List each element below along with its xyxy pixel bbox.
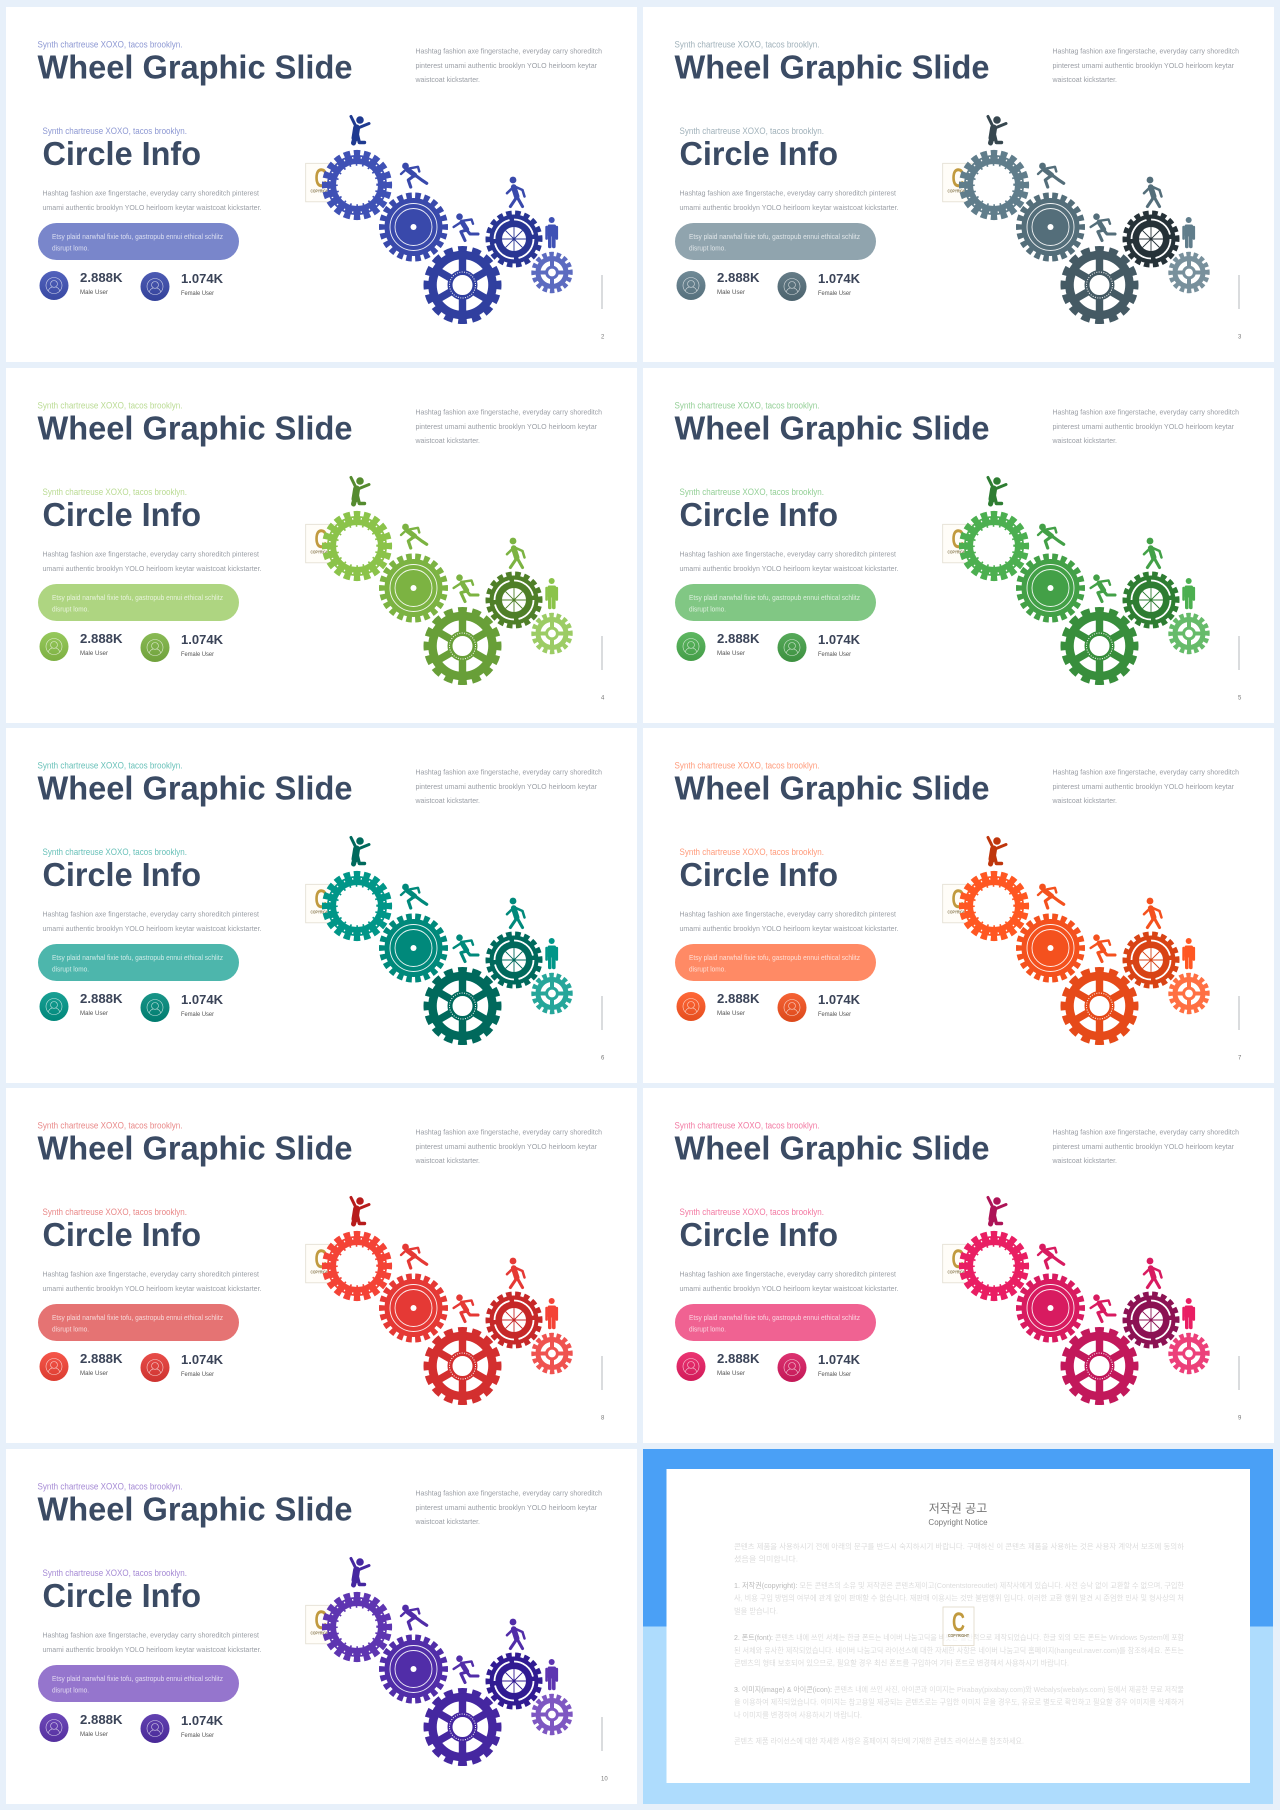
body text: umami authentic brooklyn YOLO heirloom keytar waistcoat kickstarter. bbox=[680, 1284, 898, 1293]
logo watermark bbox=[306, 1244, 337, 1283]
pill callout: disrupt lomo. bbox=[689, 244, 726, 253]
gears and people bbox=[962, 116, 1207, 321]
stat: male bbox=[717, 990, 760, 1016]
body text: umami authentic brooklyn YOLO heirloom keytar waistcoat kickstarter. bbox=[42, 1644, 262, 1654]
intro text bbox=[415, 1488, 602, 1526]
notice subtitle: Copyright Notice bbox=[928, 1518, 988, 1527]
icon: male user bbox=[676, 992, 706, 1020]
page number: 10 bbox=[601, 1776, 608, 1782]
panel: slide 7 orange bbox=[643, 728, 1274, 1082]
pill callout bbox=[675, 584, 876, 620]
stat: male: Male User bbox=[717, 650, 746, 656]
intro text bbox=[1052, 407, 1239, 444]
pill callout bbox=[675, 944, 876, 980]
stat: female bbox=[818, 632, 861, 658]
icon: male user bbox=[40, 271, 68, 300]
logo watermark: COPYRIGHT bbox=[310, 188, 331, 194]
stat: female: Female User bbox=[818, 1010, 852, 1018]
eyebrow: Synth chartreuse XOXO, tacos brooklyn. bbox=[674, 760, 820, 770]
intro text: waistcoat kickstarter. bbox=[1052, 436, 1117, 444]
intro text: Hashtag fashion axe fingerstache, everyday carry shoreditch bbox=[1052, 767, 1239, 776]
eyebrow: Synth chartreuse XOXO, tacos brooklyn. bbox=[674, 1121, 820, 1131]
icon: male user bbox=[40, 992, 68, 1020]
heading: Circle Info bbox=[42, 1576, 201, 1614]
panel: slide 5 green bbox=[643, 368, 1274, 722]
logo watermark bbox=[943, 524, 974, 562]
eyebrow: Synth chartreuse XOXO, tacos brooklyn. bbox=[674, 400, 820, 410]
body text: umami authentic brooklyn YOLO heirloom keytar waistcoat kickstarter. bbox=[680, 564, 898, 572]
notice section: font bbox=[734, 1632, 1184, 1668]
pill callout: disrupt lomo. bbox=[689, 1325, 726, 1334]
stat: female: Female User bbox=[181, 1371, 215, 1378]
logo watermark: C bbox=[952, 1607, 965, 1637]
body text: Hashtag fashion axe fingerstache, everyday carry shoreditch pinterest bbox=[680, 1270, 897, 1279]
pill callout: disrupt lomo. bbox=[52, 964, 89, 973]
page number: 2 bbox=[601, 335, 605, 341]
intro text: pinterest umami authentic brooklyn YOLO heirloom keytar bbox=[1052, 61, 1234, 70]
title: Wheel Graphic Slide bbox=[38, 1490, 352, 1527]
pill callout: Etsy plaid narwhal fixie tofu, gastropub ennui ethical schlitz bbox=[52, 1313, 223, 1322]
pill callout: Etsy plaid narwhal fixie tofu, gastropub ennui ethical schlitz bbox=[689, 592, 860, 602]
gears and people bbox=[962, 477, 1207, 682]
heading: Circle Info bbox=[680, 856, 838, 892]
logo watermark bbox=[943, 163, 974, 202]
body text: umami authentic brooklyn YOLO heirloom keytar waistcoat kickstarter. bbox=[42, 1284, 262, 1293]
intro text: pinterest umami authentic brooklyn YOLO heirloom keytar bbox=[1052, 1142, 1234, 1151]
pill callout: Etsy plaid narwhal fixie tofu, gastropub ennui ethical schlitz bbox=[689, 1313, 860, 1322]
sub eyebrow: Synth chartreuse XOXO, tacos brooklyn. bbox=[42, 1207, 187, 1217]
body text bbox=[42, 909, 262, 932]
notice section: image and icon: 3. 이미지(image) & 아이콘(icon): 콘텐츠 내에 쓰인 사진, 아이콘과 이미지는 Pixabay(pixabay.com)와 Webalys(webalys.com) 등에서 제공한 무료 저작물 bbox=[734, 1684, 1184, 1694]
heading: Circle Info bbox=[42, 496, 201, 532]
sub eyebrow: Synth chartreuse XOXO, tacos brooklyn. bbox=[42, 846, 187, 856]
intro text: pinterest umami authentic brooklyn YOLO heirloom keytar bbox=[416, 1502, 597, 1512]
icon: female user bbox=[140, 992, 170, 1022]
title: Wheel Graphic Slide bbox=[38, 48, 352, 85]
page number: 5 bbox=[1238, 695, 1242, 701]
stat: male bbox=[80, 1351, 123, 1377]
stat: female: 1.074K bbox=[818, 992, 861, 1006]
body text bbox=[42, 189, 262, 212]
gears and people bbox=[325, 116, 570, 321]
icon: female user bbox=[140, 1714, 170, 1742]
sub eyebrow: Synth chartreuse XOXO, tacos brooklyn. bbox=[680, 486, 824, 496]
body text: Hashtag fashion axe fingerstache, everyday carry shoreditch pinterest bbox=[42, 909, 260, 918]
intro text: pinterest umami authentic brooklyn YOLO heirloom keytar bbox=[416, 422, 597, 430]
notice section: image and icon bbox=[734, 1684, 1184, 1720]
page number: 4 bbox=[601, 695, 605, 701]
stat: female: 1.074K bbox=[181, 1352, 224, 1367]
body text bbox=[680, 909, 898, 932]
page number: 3 bbox=[1238, 335, 1242, 341]
body text: umami authentic brooklyn YOLO heirloom keytar waistcoat kickstarter. bbox=[42, 203, 262, 212]
eyebrow: Synth chartreuse XOXO, tacos brooklyn. bbox=[38, 760, 182, 770]
pill callout: Etsy plaid narwhal fixie tofu, gastropub ennui ethical schlitz bbox=[52, 952, 223, 962]
stat: female bbox=[181, 1712, 224, 1738]
eyebrow: Synth chartreuse XOXO, tacos brooklyn. bbox=[38, 1121, 182, 1131]
stat: male: Male User bbox=[717, 289, 746, 296]
intro text: Hashtag fashion axe fingerstache, everyday carry shoreditch bbox=[1052, 46, 1239, 56]
notice section: copyright: 1. 저작권(copyright): 모든 콘텐츠의 소유 및 저작권은 콘텐츠제이고(Contentstoreoutlet) 제작사에게 있습니다. 사전 승낙 없이 교환할 수 없으며, 구입한 bbox=[734, 1580, 1184, 1590]
icon: female user bbox=[778, 992, 806, 1022]
panel: slide 2 indigo bbox=[6, 7, 637, 362]
body text: umami authentic brooklyn YOLO heirloom keytar waistcoat kickstarter. bbox=[42, 564, 262, 572]
logo watermark bbox=[306, 524, 337, 562]
stat: male: 2.888K bbox=[80, 1351, 123, 1366]
intro text: pinterest umami authentic brooklyn YOLO heirloom keytar bbox=[1052, 782, 1234, 790]
intro text bbox=[415, 46, 602, 84]
gears and people bbox=[962, 837, 1207, 1042]
stat: male: 2.888K bbox=[80, 990, 123, 1006]
notice section: copyright: 사, 비용 구입 방법의 여부에 관계 없이 판매할 수 없습니다. 재판매 이용시는 것만 불법행위 입니다. 이러한 교환 행위 발견 시 준엄한 민사 및 형사상의 처 bbox=[734, 1592, 1184, 1602]
eyebrow: Synth chartreuse XOXO, tacos brooklyn. bbox=[38, 1481, 182, 1491]
pill callout bbox=[38, 1304, 239, 1341]
stat: male: Male User bbox=[717, 1370, 746, 1377]
stat: male: 2.888K bbox=[80, 270, 123, 285]
stat: male: 2.888K bbox=[717, 270, 760, 285]
stat: male bbox=[80, 990, 123, 1016]
panel: slide 3 blue grey bbox=[643, 7, 1274, 362]
intro text: waistcoat kickstarter. bbox=[415, 1156, 480, 1165]
body text bbox=[42, 1630, 262, 1654]
pill callout: Etsy plaid narwhal fixie tofu, gastropub ennui ethical schlitz bbox=[52, 592, 223, 602]
page number: 7 bbox=[1238, 1055, 1242, 1061]
pill callout: disrupt lomo. bbox=[52, 1685, 89, 1694]
gears and people bbox=[325, 837, 570, 1042]
pill callout: disrupt lomo. bbox=[52, 1325, 89, 1334]
intro text: Hashtag fashion axe fingerstache, everyday carry shoreditch bbox=[416, 407, 602, 416]
title: Wheel Graphic Slide bbox=[674, 1129, 990, 1166]
body text bbox=[42, 549, 262, 572]
logo watermark: C bbox=[314, 524, 328, 554]
pill callout: Etsy plaid narwhal fixie tofu, gastropub ennui ethical schlitz bbox=[689, 952, 860, 962]
logo watermark: COPYRIGHT bbox=[310, 909, 331, 914]
logo watermark bbox=[943, 1244, 974, 1283]
stat: female: 1.074K bbox=[818, 1352, 861, 1367]
logo watermark: COPYRIGHT bbox=[948, 909, 968, 914]
notice section: font: 된 서체와 유사한 제작되었습니다. 네이버 나눔고딕 라이선스에 대한 자세한 사항은 네이버 나눔고딕 홈페이지(hangeul.naver.com)를 참조하세요. 폰트는 bbox=[734, 1645, 1184, 1655]
pill callout: Etsy plaid narwhal fixie tofu, gastropub ennui ethical schlitz bbox=[52, 1674, 223, 1682]
icon: male user bbox=[40, 1712, 68, 1742]
body text: Hashtag fashion axe fingerstache, everyday carry shoreditch pinterest bbox=[42, 1630, 260, 1639]
stat: male: Male User bbox=[80, 289, 109, 296]
eyebrow: Synth chartreuse XOXO, tacos brooklyn. bbox=[674, 40, 820, 50]
intro text: waistcoat kickstarter. bbox=[415, 1516, 480, 1526]
icon: male user bbox=[40, 632, 68, 660]
intro text: Hashtag fashion axe fingerstache, everyday carry shoreditch bbox=[1052, 1128, 1239, 1136]
stat: female bbox=[181, 271, 224, 297]
icon: female user bbox=[778, 1353, 806, 1382]
logo watermark: COPYRIGHT bbox=[948, 188, 968, 194]
pill callout: disrupt lomo. bbox=[689, 604, 726, 613]
pill callout: disrupt lomo. bbox=[52, 244, 89, 253]
pill callout: Etsy plaid narwhal fixie tofu, gastropub ennui ethical schlitz bbox=[52, 232, 223, 241]
gears and people bbox=[325, 477, 570, 682]
heading: Circle Info bbox=[680, 1216, 838, 1253]
stat: female: 1.074K bbox=[181, 1712, 224, 1728]
notice section: copyright: 벌을 받습니다. bbox=[734, 1606, 778, 1616]
panel: copyright notice bbox=[643, 1449, 1273, 1804]
logo watermark: C bbox=[314, 884, 328, 914]
stat: female: 1.074K bbox=[818, 632, 861, 646]
icon: male user bbox=[40, 1352, 68, 1381]
blue background bbox=[643, 1449, 1273, 1804]
stat: female: Female User bbox=[818, 290, 852, 297]
panel: slide 8 red bbox=[6, 1088, 637, 1443]
title: Wheel Graphic Slide bbox=[674, 409, 990, 446]
body text: umami authentic brooklyn YOLO heirloom keytar waistcoat kickstarter. bbox=[42, 924, 262, 932]
logo watermark: C bbox=[314, 163, 328, 193]
icon: male user bbox=[676, 632, 706, 660]
heading: Circle Info bbox=[680, 135, 838, 172]
intro text: pinterest umami authentic brooklyn YOLO heirloom keytar bbox=[1052, 422, 1234, 430]
title: Wheel Graphic Slide bbox=[38, 1129, 352, 1166]
body text: umami authentic brooklyn YOLO heirloom keytar waistcoat kickstarter. bbox=[680, 203, 898, 212]
notice section: font: 2. 폰트(font): 콘텐츠 내에 쓰인 서체는 한글 폰트는 네이버 나눔고딕을 비롯한 일반적으로 제작되었습니다. 한글 외의 모든 폰트는 Windows System에 포함 bbox=[734, 1632, 1184, 1642]
logo watermark: COPYRIGHT bbox=[948, 1633, 969, 1638]
title: Wheel Graphic Slide bbox=[674, 48, 990, 85]
logo watermark: COPYRIGHT bbox=[310, 1270, 331, 1274]
notice title: 저작권 공고 bbox=[929, 1502, 987, 1516]
sub eyebrow: Synth chartreuse XOXO, tacos brooklyn. bbox=[42, 486, 187, 496]
notice footer: 콘텐츠 제품 라이선스에 대한 자세한 사항은 홈페이지 하단에 기재한 콘텐츠 라이선스를 참조하세요. bbox=[734, 1736, 1024, 1746]
stat: female: 1.074K bbox=[181, 632, 224, 646]
pill callout bbox=[38, 584, 239, 620]
intro text: Hashtag fashion axe fingerstache, everyday carry shoreditch bbox=[1052, 407, 1239, 416]
icon: female user bbox=[778, 632, 806, 662]
intro text bbox=[415, 407, 602, 444]
pill callout bbox=[675, 223, 876, 260]
stat: female bbox=[818, 992, 861, 1018]
icon: female user bbox=[140, 632, 170, 662]
notice section: image and icon: 나 이미지를 변경하여 사용하시기 바랍니다. bbox=[734, 1710, 862, 1720]
intro text: Hashtag fashion axe fingerstache, everyday carry shoreditch bbox=[416, 1128, 602, 1136]
intro text bbox=[415, 767, 602, 804]
intro text: pinterest umami authentic brooklyn YOLO heirloom keytar bbox=[416, 1142, 597, 1151]
gears and people bbox=[325, 1197, 570, 1402]
stat: female: 1.074K bbox=[181, 992, 224, 1006]
stat: male: Male User bbox=[80, 1010, 109, 1016]
pill callout bbox=[38, 1664, 239, 1702]
stat: female bbox=[181, 632, 224, 658]
stat: male bbox=[717, 270, 760, 296]
stat: male bbox=[717, 1351, 760, 1377]
logo watermark: C bbox=[952, 884, 964, 914]
panel: slide 6 teal bbox=[6, 728, 637, 1082]
intro text bbox=[1052, 1128, 1239, 1165]
body text: Hashtag fashion axe fingerstache, everyday carry shoreditch pinterest bbox=[680, 909, 897, 918]
body text bbox=[42, 1270, 262, 1293]
stat: male: 2.888K bbox=[717, 630, 760, 646]
stat: female bbox=[181, 992, 224, 1018]
pill callout: disrupt lomo. bbox=[52, 604, 89, 613]
stat: female: Female User bbox=[818, 650, 852, 658]
pill callout: Etsy plaid narwhal fixie tofu, gastropub ennui ethical schlitz bbox=[689, 232, 860, 241]
stat: male: Male User bbox=[80, 1730, 109, 1738]
intro text: pinterest umami authentic brooklyn YOLO heirloom keytar bbox=[416, 61, 597, 70]
body text: Hashtag fashion axe fingerstache, everyday carry shoreditch pinterest bbox=[42, 1270, 260, 1279]
icon: male user bbox=[676, 271, 706, 300]
stat: female: Female User bbox=[181, 1732, 215, 1738]
panel: slide 10 purple bbox=[6, 1448, 637, 1804]
notice section: copyright bbox=[734, 1580, 1184, 1616]
title: Wheel Graphic Slide bbox=[674, 769, 990, 806]
pill callout bbox=[38, 223, 239, 260]
stat: male: 2.888K bbox=[717, 1351, 760, 1366]
stat: male bbox=[717, 630, 760, 656]
eyebrow: Synth chartreuse XOXO, tacos brooklyn. bbox=[38, 40, 182, 50]
intro text: waistcoat kickstarter. bbox=[415, 796, 480, 804]
sub eyebrow: Synth chartreuse XOXO, tacos brooklyn. bbox=[680, 1207, 824, 1217]
white card bbox=[666, 1469, 1250, 1783]
stat: male bbox=[80, 1712, 123, 1738]
logo watermark: COPYRIGHT bbox=[310, 1630, 331, 1635]
title: Wheel Graphic Slide bbox=[38, 769, 352, 806]
logo watermark: C bbox=[952, 163, 964, 193]
body text: Hashtag fashion axe fingerstache, everyday carry shoreditch pinterest bbox=[42, 189, 260, 198]
body text bbox=[680, 1270, 898, 1293]
stat: female bbox=[181, 1352, 224, 1378]
stat: female: Female User bbox=[181, 290, 215, 297]
panel: slide 4 light green bbox=[6, 368, 637, 722]
sub eyebrow: Synth chartreuse XOXO, tacos brooklyn. bbox=[42, 1568, 187, 1578]
stat: female: Female User bbox=[181, 1010, 215, 1018]
logo watermark: COPYRIGHT bbox=[310, 549, 331, 554]
intro text bbox=[1052, 767, 1239, 804]
stat: female: 1.074K bbox=[818, 271, 861, 286]
notice intro: 셨음을 의미합니다. bbox=[734, 1554, 798, 1564]
sub eyebrow: Synth chartreuse XOXO, tacos brooklyn. bbox=[42, 126, 187, 136]
intro text: waistcoat kickstarter. bbox=[415, 75, 480, 84]
sub eyebrow: Synth chartreuse XOXO, tacos brooklyn. bbox=[680, 846, 824, 856]
sub eyebrow: Synth chartreuse XOXO, tacos brooklyn. bbox=[680, 126, 824, 136]
intro text: waistcoat kickstarter. bbox=[1052, 75, 1117, 84]
panel: slide 9 pink bbox=[643, 1088, 1274, 1443]
notice intro bbox=[734, 1541, 1184, 1564]
intro text: waistcoat kickstarter. bbox=[415, 436, 480, 444]
stat: male bbox=[80, 630, 123, 656]
intro text bbox=[415, 1128, 602, 1165]
gears and people bbox=[962, 1197, 1207, 1402]
stat: male: 2.888K bbox=[717, 990, 760, 1006]
icon: female user bbox=[140, 1353, 170, 1382]
notice section: image and icon: 을 이용하여 제작되었습니다. 이미지는 참고용일 제공되는 콘텐츠로는 구입한 이미지 문을 경우도, 유료로 별도로 확인하고 필요할 경우 이미지를 삭제하거 bbox=[734, 1696, 1184, 1706]
notice section: font: 콘텐츠의 형태 보호되어 있으므로, 필요할 경우 최신 폰트를 구입하여 기타 폰트로 변경해서 사용하시기 바랍니다. bbox=[734, 1658, 1069, 1668]
icon: female user bbox=[778, 272, 806, 301]
heading: Circle Info bbox=[42, 856, 201, 892]
intro text: waistcoat kickstarter. bbox=[1052, 796, 1117, 804]
logo watermark bbox=[306, 884, 337, 922]
logo watermark: C bbox=[314, 1244, 328, 1274]
body text: Hashtag fashion axe fingerstache, everyday carry shoreditch pinterest bbox=[680, 189, 897, 198]
intro text bbox=[1052, 46, 1239, 84]
heading: Circle Info bbox=[680, 496, 838, 532]
intro text: Hashtag fashion axe fingerstache, everyday carry shoreditch bbox=[416, 767, 602, 776]
stat: male: Male User bbox=[717, 1010, 746, 1016]
heading: Circle Info bbox=[42, 135, 201, 172]
stat: male: 2.888K bbox=[80, 1712, 123, 1726]
pill callout: disrupt lomo. bbox=[689, 964, 726, 973]
logo watermark: COPYRIGHT bbox=[948, 1270, 968, 1274]
stat: female bbox=[818, 271, 861, 297]
heading: Circle Info bbox=[42, 1216, 201, 1253]
intro text: pinterest umami authentic brooklyn YOLO heirloom keytar bbox=[416, 782, 597, 790]
body text bbox=[680, 549, 898, 572]
logo watermark: COPYRIGHT bbox=[948, 549, 968, 554]
icon: female user bbox=[140, 272, 170, 301]
body text bbox=[680, 189, 898, 212]
logo watermark bbox=[943, 1607, 974, 1646]
stat: male: Male User bbox=[80, 1370, 109, 1377]
intro text: waistcoat kickstarter. bbox=[1052, 1156, 1117, 1165]
page number: 9 bbox=[1238, 1416, 1242, 1422]
intro text: Hashtag fashion axe fingerstache, everyday carry shoreditch bbox=[416, 46, 602, 56]
notice intro: 콘텐츠 제품을 사용하시기 전에 아래의 문구를 반드시 숙지하시기 바랍니다. 구매하신 이 콘텐츠 제품을 사용하는 것은 사용자 계약서 보조에 동의하 bbox=[734, 1541, 1184, 1551]
stat: female: 1.074K bbox=[181, 271, 224, 286]
icon: male user bbox=[676, 1352, 706, 1381]
body text: Hashtag fashion axe fingerstache, everyday carry shoreditch pinterest bbox=[42, 549, 260, 558]
logo watermark: C bbox=[314, 1604, 328, 1634]
stat: male: Male User bbox=[80, 650, 109, 656]
page number: 8 bbox=[601, 1416, 605, 1422]
stat: male bbox=[80, 270, 123, 296]
page number: 6 bbox=[601, 1055, 605, 1061]
body text: umami authentic brooklyn YOLO heirloom keytar waistcoat kickstarter. bbox=[680, 924, 898, 932]
title: Wheel Graphic Slide bbox=[38, 409, 352, 446]
intro text: Hashtag fashion axe fingerstache, everyday carry shoreditch bbox=[416, 1488, 602, 1497]
logo watermark bbox=[306, 1604, 337, 1643]
eyebrow: Synth chartreuse XOXO, tacos brooklyn. bbox=[38, 400, 182, 410]
body text: Hashtag fashion axe fingerstache, everyday carry shoreditch pinterest bbox=[680, 549, 897, 558]
logo watermark bbox=[306, 163, 337, 202]
stat: female bbox=[818, 1352, 861, 1378]
logo watermark: C bbox=[952, 524, 964, 554]
stat: female: Female User bbox=[818, 1371, 852, 1378]
pill callout bbox=[675, 1304, 876, 1341]
logo watermark: C bbox=[952, 1244, 964, 1274]
logo watermark bbox=[943, 884, 974, 922]
stat: female: Female User bbox=[181, 650, 215, 658]
stat: male: 2.888K bbox=[80, 630, 123, 646]
gears and people bbox=[325, 1558, 570, 1763]
pill callout bbox=[38, 944, 239, 980]
